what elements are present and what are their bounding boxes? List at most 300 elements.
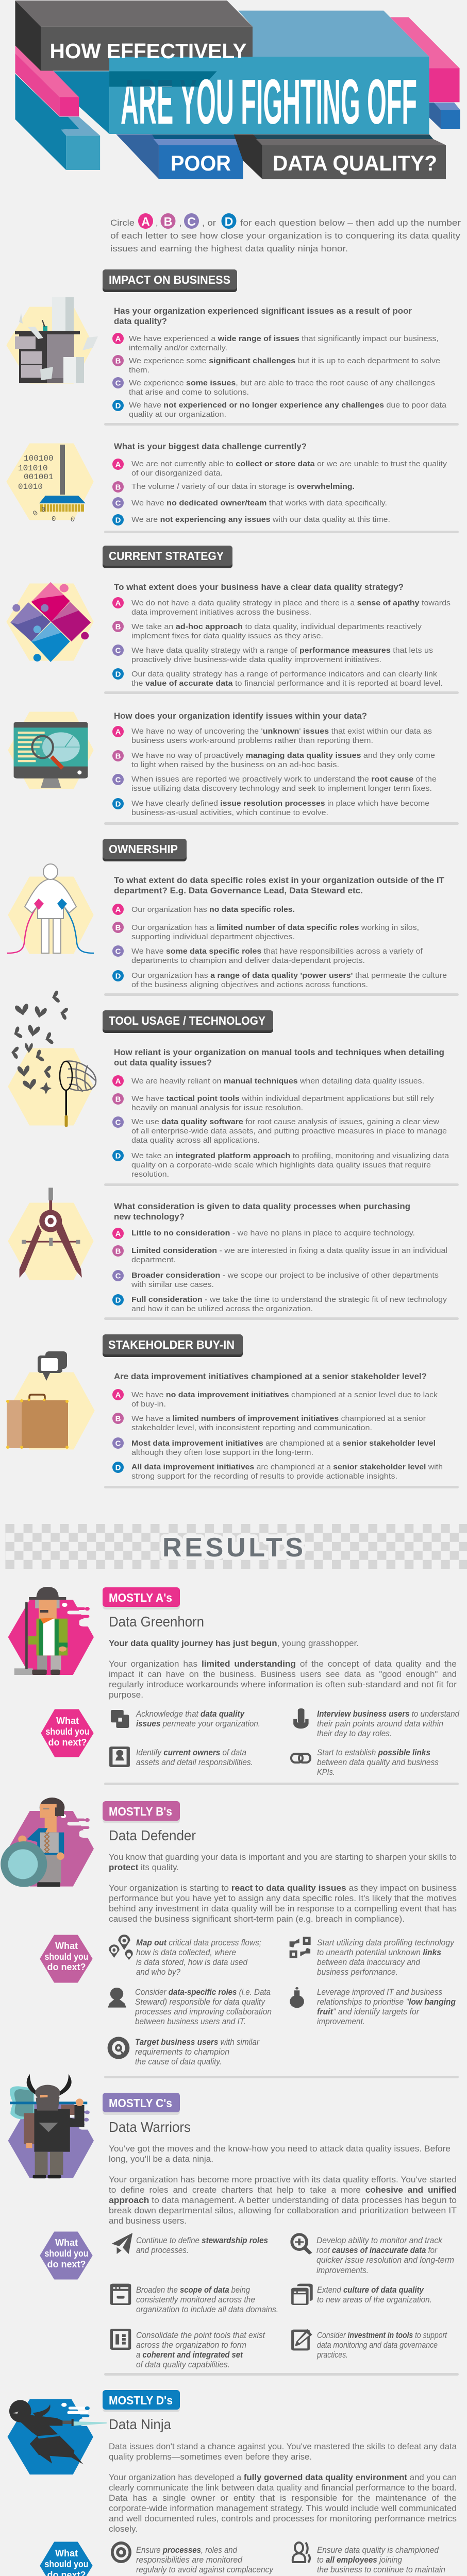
tip: invest in tools: data monitoring and data governance <box>317 2341 438 2350</box>
answer D: the value of accurate data to financial performance and it is reported at board level. <box>131 679 443 688</box>
answer A <box>112 1389 438 1409</box>
result badge: MOSTLY C's <box>109 2096 172 2110</box>
tip: map out: Map out critical data process flows; <box>136 1938 261 1947</box>
illustration: briefcase and speech bubbles <box>6 1351 94 1449</box>
icon: target <box>108 2037 129 2059</box>
result badge <box>103 1587 180 1609</box>
tip: acknowledge: issues permeate your organization. <box>136 1719 260 1728</box>
result description: long, you'll be a data ninja. <box>109 2155 213 2164</box>
icon: copies <box>111 1710 129 1728</box>
tip: stewardship <box>112 2233 268 2255</box>
tip: target users <box>108 2037 260 2066</box>
tip: profiling: between data inaccuracy and <box>317 1958 421 1967</box>
illustration: broom sweeping binary: 100100 <box>24 454 54 463</box>
tip: data roles: processes and improving collaboration <box>135 2007 272 2016</box>
icon: pencil on pad <box>291 2329 312 2350</box>
answer B: B <box>115 1247 121 1256</box>
icon: window <box>110 2284 131 2305</box>
tip: map out: how is data collected, where <box>136 1948 236 1957</box>
result description: Data has a single owner or entity that is responsible for the maintenance of the <box>109 2494 457 2503</box>
answer A: A <box>115 599 121 608</box>
intro instructions: for each question below – then add up the number <box>240 218 461 228</box>
tip: monitor <box>290 2233 454 2275</box>
answer D: D <box>115 670 121 679</box>
answer A: We do not have a data quality strategy in place and there is a sense of apathy towards <box>131 599 451 607</box>
answer B: B <box>115 483 121 492</box>
answer D <box>112 1294 447 1313</box>
answer D: Our organization has a range of data quality 'power users' that permeate the culture <box>131 971 447 980</box>
illustration: broom sweeping binary: 0 <box>31 509 40 518</box>
letter badge C: C <box>187 215 196 228</box>
answer A: A <box>115 727 121 737</box>
tip: consolidate: Consolidate the point tools that exist <box>136 2331 265 2340</box>
title: 3D block headline <box>15 1 460 179</box>
answer B: We have tactical point tools within individual department applications but still rely <box>131 1094 435 1103</box>
tip: scope: Broaden the scope of data being <box>136 2285 251 2295</box>
answer C <box>112 645 433 664</box>
answer C: We experience some issues , but are able to trace the root cause of any challenges <box>129 379 435 387</box>
answer B: B <box>115 1415 121 1423</box>
answer A <box>112 726 432 745</box>
answer A: We are not currently able to collect or store data or we are unable to trust the quality <box>131 460 447 468</box>
answer C: departments to champion and deliver data-dependant projects. <box>131 956 365 965</box>
letter badge A: A <box>141 215 150 228</box>
callout: what should you do next <box>41 2543 92 2576</box>
question: How does your organization identify issues within your data? <box>114 711 367 721</box>
headline words: data quality: DATA QUALITY? <box>273 151 437 175</box>
result description <box>109 1853 457 1924</box>
icon: portrait frame <box>109 1747 130 1767</box>
answer D: D <box>115 402 121 410</box>
question <box>114 876 444 895</box>
answer C <box>112 1437 436 1457</box>
callout: what should you do next: do next? <box>47 1962 86 1972</box>
question: What is your biggest data challenge currently? <box>114 442 307 451</box>
callout: what should you do next: What <box>55 2238 78 2248</box>
result badge <box>103 1801 180 1823</box>
answer C <box>112 377 435 397</box>
answer C: proactively drive business-wide data quality improvement initiatives. <box>131 655 381 664</box>
question: department? E.g. Data Governance Lead, Data Steward etc. <box>114 886 363 895</box>
illustration: butterflies and net <box>9 990 96 1127</box>
result description: protect its quality. <box>109 1863 179 1872</box>
answer C <box>112 774 437 793</box>
callout: what should you do next <box>41 2232 92 2279</box>
section heading: current strategy <box>103 546 232 568</box>
answer C: that arise and come to solutions. <box>129 388 249 397</box>
answer D: and how it can be utilized across the organization. <box>131 1304 313 1313</box>
tip: scope: organization to include all data domains. <box>136 2305 278 2314</box>
result description: Your organization has become more proactive with its data quality efforts. You've started <box>109 2175 457 2184</box>
answer B: B <box>115 752 121 760</box>
question <box>114 307 412 326</box>
result panel: mostly A <box>42 1587 460 1777</box>
answer A: A <box>115 335 121 343</box>
tip: champion: to all employees joining <box>317 2555 403 2565</box>
answer B: to light when raised by the business on an ad-hoc basis. <box>131 760 339 769</box>
character: data greenhorn <box>8 1587 95 1675</box>
callout: what should you do next <box>42 1710 93 1756</box>
result title: Data Greenhorn <box>109 1614 204 1630</box>
answer C: issue utilizing data discovery technology and seek to implement longer term fixes. <box>131 784 432 793</box>
callout: what should you do next: should you <box>45 1726 90 1737</box>
answer C: Most data improvement initiatives are championed at a senior stakeholder level <box>131 1439 436 1448</box>
letter badge D: D <box>225 215 233 228</box>
answer A: A <box>115 1229 121 1239</box>
result description: impact it can have on the business. Business users see data as "good enough" and <box>109 1670 457 1679</box>
answer D: Our data quality strategy has a range of performance indicators and can clearly link <box>131 670 438 679</box>
icon: layout <box>110 2329 131 2350</box>
question <box>114 1048 444 1067</box>
tip: interview <box>293 1708 460 1738</box>
answer C: C <box>115 1439 121 1448</box>
icon: refresh arrows <box>290 1937 311 1958</box>
tip: possible links: KPIs. <box>317 1768 335 1777</box>
answer A: A <box>115 1391 121 1399</box>
result description: break down departmental silos, allowing for collaboration and prioritization between IT <box>109 2206 457 2215</box>
tip: target users: requirements to champion <box>135 2047 229 2057</box>
callout: what should you do next: should you <box>44 1952 89 1962</box>
tip: invest in tools: Consider investment in tools to support <box>317 2331 447 2340</box>
icon: stacked windows <box>291 2284 313 2305</box>
question <box>114 1202 410 1222</box>
tip: map out <box>109 1935 261 1977</box>
result description: caused the business significant short-term pain (e.g. breach in compliance). <box>109 1914 405 1924</box>
result description: Your data quality journey has just begun , young grasshopper. <box>109 1639 359 1648</box>
result description <box>109 2144 457 2226</box>
tip: monitoring: Ensure processes, roles and <box>136 2546 238 2555</box>
question block 2 <box>112 442 447 526</box>
intro instructions: issues and earning the highest data quality ninja honor. <box>110 244 348 253</box>
answer A: We have no way of uncovering the ' unknown ' issues that exist within our data as <box>131 727 432 736</box>
tip: profiling: business performance. <box>317 1968 398 1977</box>
result description: closely. <box>109 2524 138 2534</box>
answer D: of the business aligning objectives and actions across functions. <box>131 980 368 989</box>
intro instructions: Circle <box>110 218 135 228</box>
tip: interview: Interview business users to understand <box>317 1709 460 1719</box>
letter badge B: B <box>164 215 172 228</box>
tip: monitor: quicker issue resolution and long-term <box>316 2256 454 2265</box>
tip: profiling: Start utilizing data profiling technology <box>317 1938 455 1947</box>
answer C: We use data quality software for root cause analysis of issues, gaining a clear view <box>131 1117 439 1126</box>
icon: microphone <box>293 1708 309 1728</box>
tip: profiling: to unearth potential unknown links <box>317 1948 441 1957</box>
icon: chain link <box>291 1754 310 1762</box>
illustration: broom sweeping binary: 0 <box>52 515 56 523</box>
tip: monitor: improvements. <box>316 2266 369 2275</box>
answer A <box>112 333 439 352</box>
title blocks <box>15 1 460 179</box>
tip: champion <box>293 2543 445 2576</box>
answer B: We have a limited numbers of improvement initiatives championed at a senior <box>131 1414 426 1423</box>
section heading: tool usage <box>103 1010 273 1033</box>
letter badge A <box>138 213 153 229</box>
answer B: B <box>115 357 121 366</box>
result description: and business users. <box>109 2216 187 2226</box>
result description: approach to data management. A better understanding of data processes has begun to <box>109 2196 457 2205</box>
answer A <box>112 904 295 915</box>
answer C: C <box>115 379 121 387</box>
section heading: stakeholder buy-in: STAKEHOLDER BUY-IN <box>108 1338 235 1351</box>
answer A: business users work-around problems rather than reporting them. <box>131 736 373 745</box>
answer D <box>112 1150 449 1179</box>
answer A: A <box>115 461 121 469</box>
result badge: MOSTLY B's <box>109 1805 172 1818</box>
answer C <box>112 945 423 965</box>
answer C <box>112 1116 447 1145</box>
answer A: data improvement initiatives across the business. <box>131 608 311 617</box>
question: How reliant is your organization on manual tools and techniques when detailing <box>114 1048 444 1057</box>
tip: monitoring: responsibilities are monitored <box>136 2555 243 2565</box>
answer D <box>112 1462 443 1481</box>
tip: consolidate <box>110 2329 265 2369</box>
result panel: mostly B <box>41 1801 457 2066</box>
question: out data quality issues? <box>114 1058 212 1067</box>
illustration: broom sweeping binary: 101010 <box>18 464 48 473</box>
question block 5 <box>112 876 447 989</box>
question: To what extent do data specific roles exist in your organization outside of the IT <box>114 876 444 885</box>
answer C: C <box>115 947 121 956</box>
answer D: resolution. <box>131 1170 169 1179</box>
callout: what should you do next: do next? <box>47 2259 86 2269</box>
answer B: implement fixes for data quality issues as they arise. <box>131 632 323 640</box>
answer A: A <box>115 906 121 914</box>
callout: what should you do next <box>41 1936 92 1982</box>
question: Has your organization experienced significant issues as a result of poor <box>114 307 412 316</box>
illustration: jigsaw puzzle <box>7 582 93 662</box>
answer C: We have data quality strategy with a range of performance measures that lets us <box>131 646 433 655</box>
answer D: D <box>115 1463 121 1472</box>
result title: Data Ninja <box>109 2416 171 2432</box>
question: To what extent does your business have a clear data quality strategy? <box>114 583 404 592</box>
answer C: C <box>115 646 121 655</box>
tip: stewardship: Continue to define stewardship roles <box>136 2236 268 2245</box>
tip: invest in tools <box>291 2329 447 2360</box>
answer A: A <box>115 1077 121 1086</box>
tip: culture: Extend culture of data quality <box>317 2285 424 2295</box>
tip: champion: the business to continue to maintain <box>317 2565 445 2574</box>
callout: what should you do next: should you <box>44 2559 89 2569</box>
icon: map pins <box>109 1935 133 1960</box>
answer C: Broader consideration - we scope our project to be inclusive of other departments <box>131 1271 439 1280</box>
answer D: We are not experiencing any issues with our data quality at this time. <box>131 515 390 524</box>
answer D <box>112 970 447 989</box>
icon: flask <box>290 1987 304 2008</box>
answer C: When issues are reported we proactively work to understand the root cause of the <box>131 775 437 784</box>
result panel: mostly D <box>41 2390 457 2576</box>
question block 6 <box>112 1048 449 1179</box>
result description: performance but you have yet to assign any data specific roles. It's likely that the motives <box>109 1894 457 1903</box>
tip: low hanging fruit: fruit" and identify targets for <box>317 2007 420 2016</box>
tip: champion: Ensure data quality is championed <box>317 2546 439 2555</box>
answer D: We take an integrated platform approach to profiling, monitoring and visualizing data <box>131 1151 449 1160</box>
answer A <box>112 597 451 617</box>
question block 1 <box>112 307 447 419</box>
letter badge B <box>161 213 175 229</box>
answer A: Little to no consideration - we have no plans in place to acquire technology. <box>131 1229 415 1238</box>
results banner <box>5 1524 467 1569</box>
illustration: desk with paper stacks <box>7 297 98 383</box>
answer C <box>112 497 387 509</box>
intro instructions <box>110 213 461 253</box>
answer C: C <box>115 1272 121 1281</box>
question block 7 <box>112 1202 447 1313</box>
icon: people outline <box>293 2543 310 2563</box>
character: data defender <box>1 1798 95 1887</box>
answer B: The volume / variety of our data in storage is overwhelming. <box>131 482 355 491</box>
tip: scope: consistently monitored across the <box>136 2295 255 2304</box>
question: data quality? <box>114 317 167 326</box>
tip: low hanging fruit <box>290 1987 456 2026</box>
illustration: broom sweeping binary: 001001 <box>24 472 54 482</box>
callout: what should you do next: What <box>55 1941 78 1951</box>
answer D: D <box>115 972 121 981</box>
tip: acknowledge: Acknowledge that data quality <box>136 1709 245 1719</box>
result description: You've got the moves and the know-how you need to attack data quality issues. Before <box>109 2144 451 2154</box>
illustration: person with wires <box>7 864 94 953</box>
intro instructions: , or <box>202 218 216 228</box>
answer B: department. <box>131 1256 176 1264</box>
result description: regularly introduce workarounds where information is often sub-standard and not fit for <box>109 1680 457 1689</box>
answer B: them. <box>129 366 149 375</box>
result description: clearly communicate the link between data quality and financial performance to the board. <box>109 2483 457 2493</box>
answer B: We experience some significant challenges but it is up to each department to solve <box>129 357 440 365</box>
answer D: D <box>115 800 121 809</box>
answer A: We have no data improvement initiatives championed at a senior level due to lack <box>131 1391 438 1399</box>
section heading: ownership: OWNERSHIP <box>109 842 178 856</box>
answer C: C <box>115 776 121 784</box>
tip: target users: Target business users with similar <box>135 2038 260 2047</box>
answer B <box>112 1093 435 1112</box>
tip: scope <box>110 2284 278 2314</box>
icon: person <box>108 1988 126 2008</box>
answer D <box>112 798 429 817</box>
answer A <box>112 1228 415 1239</box>
result description: quality problems—sometimes even before they arise. <box>109 2452 312 2462</box>
illustration: broom sweeping binary: 0 <box>70 515 76 524</box>
tip: acknowledge <box>111 1709 260 1728</box>
result description: You know that guarding your data is important and you are starting to sharpen your skills to <box>109 1853 457 1862</box>
question block 8 <box>112 1372 443 1481</box>
answer B <box>112 1245 447 1264</box>
icon: magnifier plus <box>290 2233 312 2255</box>
section heading: stakeholder buy-in <box>103 1334 243 1357</box>
answer B <box>112 355 440 375</box>
answer C: data quality across all applications. <box>131 1136 260 1145</box>
answer D: We have clearly defined issue resolution processes in place which have become <box>131 799 429 808</box>
answer B <box>112 621 422 640</box>
answer D: D <box>115 1296 121 1304</box>
illustration: broom sweeping binary: 0 <box>41 506 45 514</box>
tip: interview: their pain points around data within <box>317 1719 443 1728</box>
answer A: Our organization has no data specific roles. <box>131 905 295 914</box>
tip: monitor: root causes of inaccurate data for <box>316 2246 438 2255</box>
tip: low hanging fruit: relationships to prioritise "low hanging <box>317 1997 456 2007</box>
tip: interview: their day to day roles. <box>317 1729 392 1738</box>
result description: Your organization has developed a fully governed data quality environment and you can <box>109 2473 457 2482</box>
tip: identify owners: assets and detail responsibilities. <box>136 1758 253 1767</box>
intro instructions: , <box>179 218 182 228</box>
result badge: MOSTLY A's <box>109 1591 172 1604</box>
answer B: stakeholder level, with inconsistent reporting and communication. <box>131 1423 372 1432</box>
tip: map out: and who by? <box>136 1968 181 1977</box>
tip: stewardship: and processes. <box>136 2246 189 2255</box>
tip: monitoring <box>111 2541 274 2576</box>
answer B <box>112 750 435 769</box>
headline word: poor: POOR <box>171 151 231 175</box>
answer B: We take an ad-hoc approach to data quality, individual departments reactively <box>131 622 422 631</box>
question block 3 <box>112 583 451 688</box>
question: Are data improvement initiatives championed at a senior stakeholder level? <box>114 1372 427 1381</box>
section heading: tool usage: TOOL USAGE / TECHNOLOGY <box>109 1014 265 1027</box>
tip: invest in tools: practices. <box>316 2350 348 2360</box>
answer B <box>112 922 419 941</box>
question: What consideration is given to data quality processes when purchasing <box>114 1202 410 1211</box>
answer D: strong support for the recording of results to provide actionable insights. <box>131 1472 397 1481</box>
answer D: D <box>115 516 121 524</box>
icon: paper plane <box>112 2233 132 2254</box>
tip: target users: the cause of data quality. <box>135 2057 222 2066</box>
answer C: of all enterprise-wide data assets, and putting proactive measures in place to manage <box>131 1127 447 1136</box>
result description <box>109 1639 457 1700</box>
answer A: We have experienced a wide range of issues that significantly impact our business, <box>129 334 439 343</box>
answer B: B <box>115 923 121 933</box>
answer C: C <box>115 499 121 508</box>
tip: consolidate: across the organization to form <box>136 2341 246 2350</box>
callout: what should you do next: What <box>56 1716 79 1726</box>
answer B: B <box>115 1095 121 1104</box>
answer D <box>112 668 443 688</box>
callout: what should you do next: do next? <box>48 1737 87 1748</box>
tip: data roles: between business users and IT. <box>135 2017 246 2026</box>
letter badge C <box>184 213 199 229</box>
answer D: All data improvement initiatives are championed at a senior stakeholder level with <box>131 1463 443 1471</box>
character: data warrior <box>8 2074 95 2178</box>
result description: and well documented rules, controls and processes for monitoring performance metrics <box>109 2514 457 2523</box>
tip: data roles: Consider data-specific roles (i.e. Data <box>135 1988 271 1997</box>
illustration: monitor with magnifier <box>9 713 93 788</box>
answer C: C <box>115 1118 121 1127</box>
answer B: Our organization has a limited number of data specific roles working in silos, <box>131 923 419 932</box>
answer D: We have not experienced or no longer experience any challenges due to poor data <box>129 401 447 410</box>
icon: disc <box>111 2541 131 2563</box>
section heading: ownership <box>103 839 187 861</box>
answer B: Limited consideration - we are interested in fixing a data quality issue in an individual <box>131 1246 447 1255</box>
answer D: quality on a corporate-wide scale which highlights data quality issues that require <box>131 1161 431 1170</box>
callout: what should you do next: should you <box>44 2248 89 2259</box>
tip: possible links <box>291 1748 439 1777</box>
result badge: MOSTLY D's <box>109 2394 173 2407</box>
section heading: impact on business <box>103 269 237 292</box>
headline line 1: HOW EFFECTIVELY <box>49 39 246 63</box>
answer D: Full consideration - we take the time to understand the strategic fit of new technology <box>131 1295 447 1304</box>
result description: to define roles and create charters that help to take a more cohesive and unified <box>109 2185 457 2195</box>
answer A <box>112 459 447 478</box>
answer C: We have no dedicated owner/team that works with data specifically. <box>131 499 387 507</box>
tip: monitoring: regularly to avoid against complacency <box>136 2565 274 2574</box>
answer C: We have some data specific roles that have responsibilities across a variety of <box>131 947 423 956</box>
answer D: D <box>115 1152 121 1160</box>
letter badge D <box>222 213 236 229</box>
answer A: internally and/or externally. <box>129 344 227 352</box>
tip: identify owners <box>109 1747 253 1767</box>
illustration: broom sweeping binary <box>7 444 93 524</box>
tip: data roles <box>108 1988 272 2026</box>
question block 4 <box>112 711 437 817</box>
illustration: broom sweeping binary: 01010 <box>18 482 43 492</box>
section heading: impact on business: IMPACT ON BUSINESS <box>109 273 230 286</box>
tip: data roles: Steward) responsible for data quality <box>135 1997 266 2007</box>
